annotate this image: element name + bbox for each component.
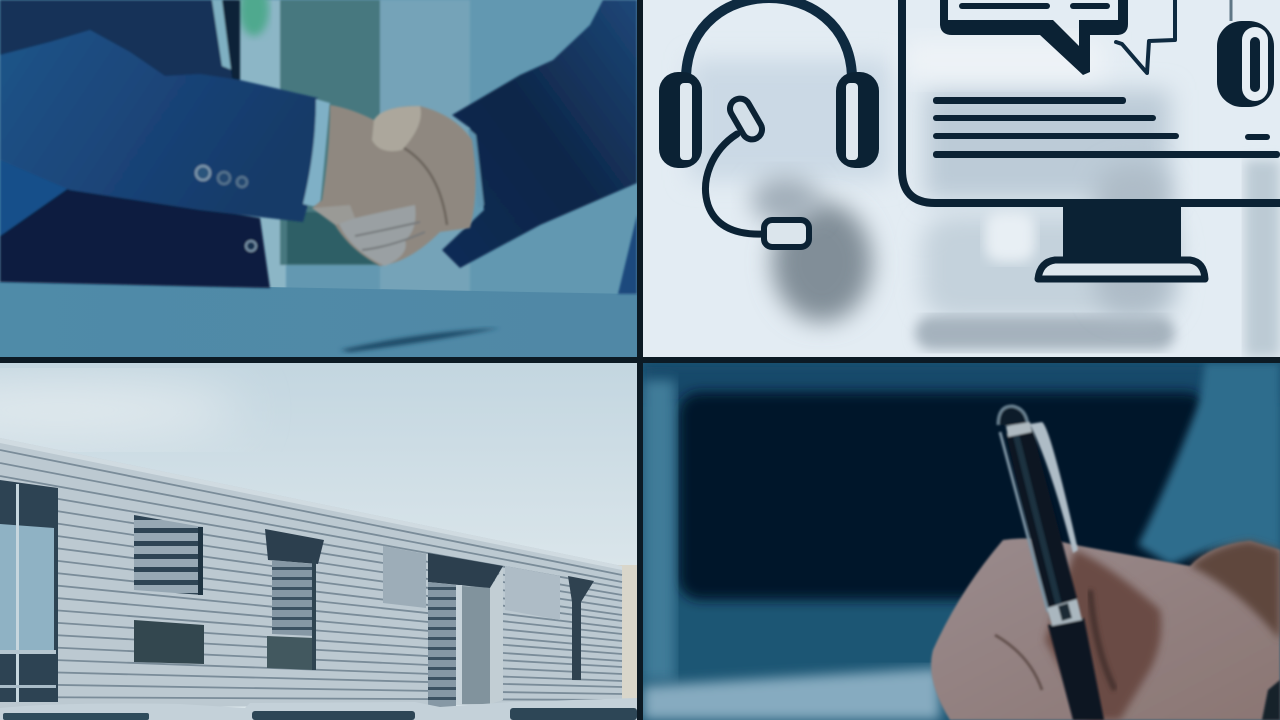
building facade [0,438,622,708]
sky [0,363,637,720]
clasped hands [312,105,476,266]
left jacket [0,0,330,288]
parked cars [0,698,637,720]
hand [931,538,1280,720]
ground-floor window wall [0,480,58,702]
panel: support and computer icons [643,0,1280,357]
icon: computer monitor [902,0,1280,279]
blurred background shapes [690,40,1280,357]
right jacket [442,0,637,294]
panel: handshake photo [0,0,637,357]
table surface [0,282,637,357]
icon: computer mouse [1217,0,1274,107]
office background [239,0,470,291]
icon: headset [659,0,879,247]
entrance door [428,553,503,588]
icon: speech bubbles [940,0,1175,75]
laptop screen background [643,364,1212,720]
pen [998,406,1104,720]
upper and lower windows [134,515,203,595]
panel: industrial building photo [0,363,637,720]
panel: hand writing with pen photo [643,363,1280,720]
sleeve [1138,363,1280,565]
